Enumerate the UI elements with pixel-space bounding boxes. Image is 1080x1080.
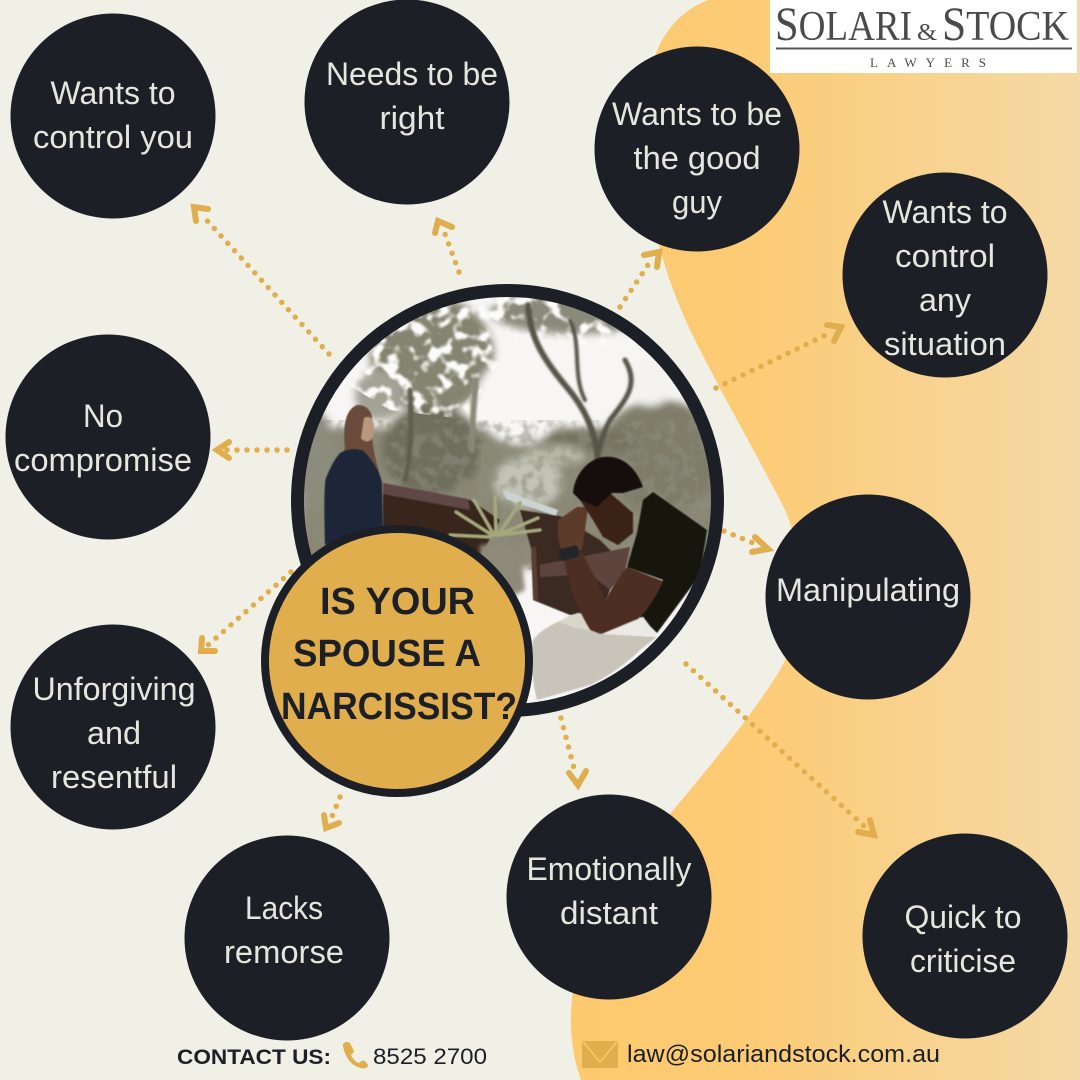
icon: envelope <box>582 1041 618 1068</box>
plant <box>450 497 540 537</box>
arrow: to needs to be right <box>435 221 459 272</box>
email address: law@solariandstock.com.au <box>627 1041 940 1068</box>
bubble: no compromise: compromise <box>14 442 192 478</box>
bubble: lacks remorse <box>184 836 390 1040</box>
bubble: manipulating: Manipulating <box>776 572 960 608</box>
bubble: no compromise <box>6 334 210 540</box>
bubble: wants to control any situation: any <box>919 282 971 318</box>
cabin <box>383 483 630 620</box>
title badge: SPOUSE A <box>293 633 481 675</box>
bubble: no compromise: No <box>83 398 123 434</box>
trousers <box>532 613 657 700</box>
hem <box>602 617 657 636</box>
bubble: emotionally distant <box>506 794 712 1000</box>
logo: LAWYERS <box>870 55 986 70</box>
background wave shape <box>571 0 1080 1080</box>
tree branches <box>405 305 631 480</box>
logo <box>770 0 1077 73</box>
bubble: emotionally distant: distant <box>560 895 658 931</box>
bubble: manipulating <box>766 494 970 700</box>
bubble: wants to control you: Wants to <box>50 75 176 111</box>
contact label: CONTACT US: <box>177 1046 331 1069</box>
bubble: needs to be right <box>304 0 510 204</box>
phone number: 8525 2700 <box>373 1044 487 1069</box>
bubble: wants to control any situation <box>842 172 1048 378</box>
arrow: to unforgiving and resentful <box>201 572 291 651</box>
title badge <box>265 529 529 793</box>
bubble: needs to be right: Needs to be <box>326 56 498 92</box>
bubble: unforgiving and resentful: resentful <box>51 759 177 795</box>
arrow: to wants to control you <box>194 207 329 354</box>
bubble: wants to be the good guy: guy <box>672 184 722 220</box>
title badge: NARCISSIST? <box>281 686 517 728</box>
woman <box>324 405 383 545</box>
watch <box>558 545 580 561</box>
arrow: to wants to be the good guy <box>620 252 659 307</box>
title badge: IS YOUR <box>320 581 475 623</box>
hand <box>558 507 588 552</box>
bubble: unforgiving and resentful: Unforgiving <box>32 671 196 707</box>
man <box>532 457 707 700</box>
bubble: quick to criticise <box>862 834 1068 1038</box>
arm <box>563 552 663 634</box>
logo: & <box>917 20 937 46</box>
arrow: to no compromise <box>217 442 287 458</box>
bubble: unforgiving and resentful <box>10 624 216 830</box>
bubble: wants to control any situation: Wants to <box>882 194 1008 230</box>
arrow: to manipulating <box>724 531 768 552</box>
bubble: wants to be the good guy <box>594 46 800 252</box>
bubble: wants to control you <box>10 14 216 218</box>
bubble: lacks remorse: remorse <box>224 934 344 970</box>
bubble: wants to control you: control you <box>33 119 193 155</box>
hair <box>573 457 643 507</box>
bubble: wants to be the good guy: the good <box>634 140 760 176</box>
face <box>580 493 633 545</box>
arrow: to emotionally distant <box>561 718 586 785</box>
arrow: to lacks remorse <box>324 797 340 828</box>
icon: phone <box>343 1042 368 1068</box>
bubble: emotionally distant: Emotionally <box>526 851 692 887</box>
bubble: quick to criticise: Quick to <box>904 899 1022 935</box>
bubble: needs to be right: right <box>380 100 445 136</box>
torso shirt <box>627 492 707 633</box>
bubble: unforgiving and resentful: and <box>87 715 141 751</box>
bubble: wants to be the good guy: Wants to be <box>612 96 782 132</box>
bubble: wants to control any situation: situation <box>884 326 1006 362</box>
foliage masses <box>370 297 494 413</box>
photo: couple outdoors in circle frame <box>295 290 722 710</box>
bubble: quick to criticise: criticise <box>910 943 1016 979</box>
bubble: wants to control any situation: control <box>895 238 995 274</box>
arrow: to quick to criticise <box>686 664 874 835</box>
bubble: lacks remorse: Lacks <box>245 890 323 926</box>
arrow: to wants to control any situation <box>716 325 841 388</box>
